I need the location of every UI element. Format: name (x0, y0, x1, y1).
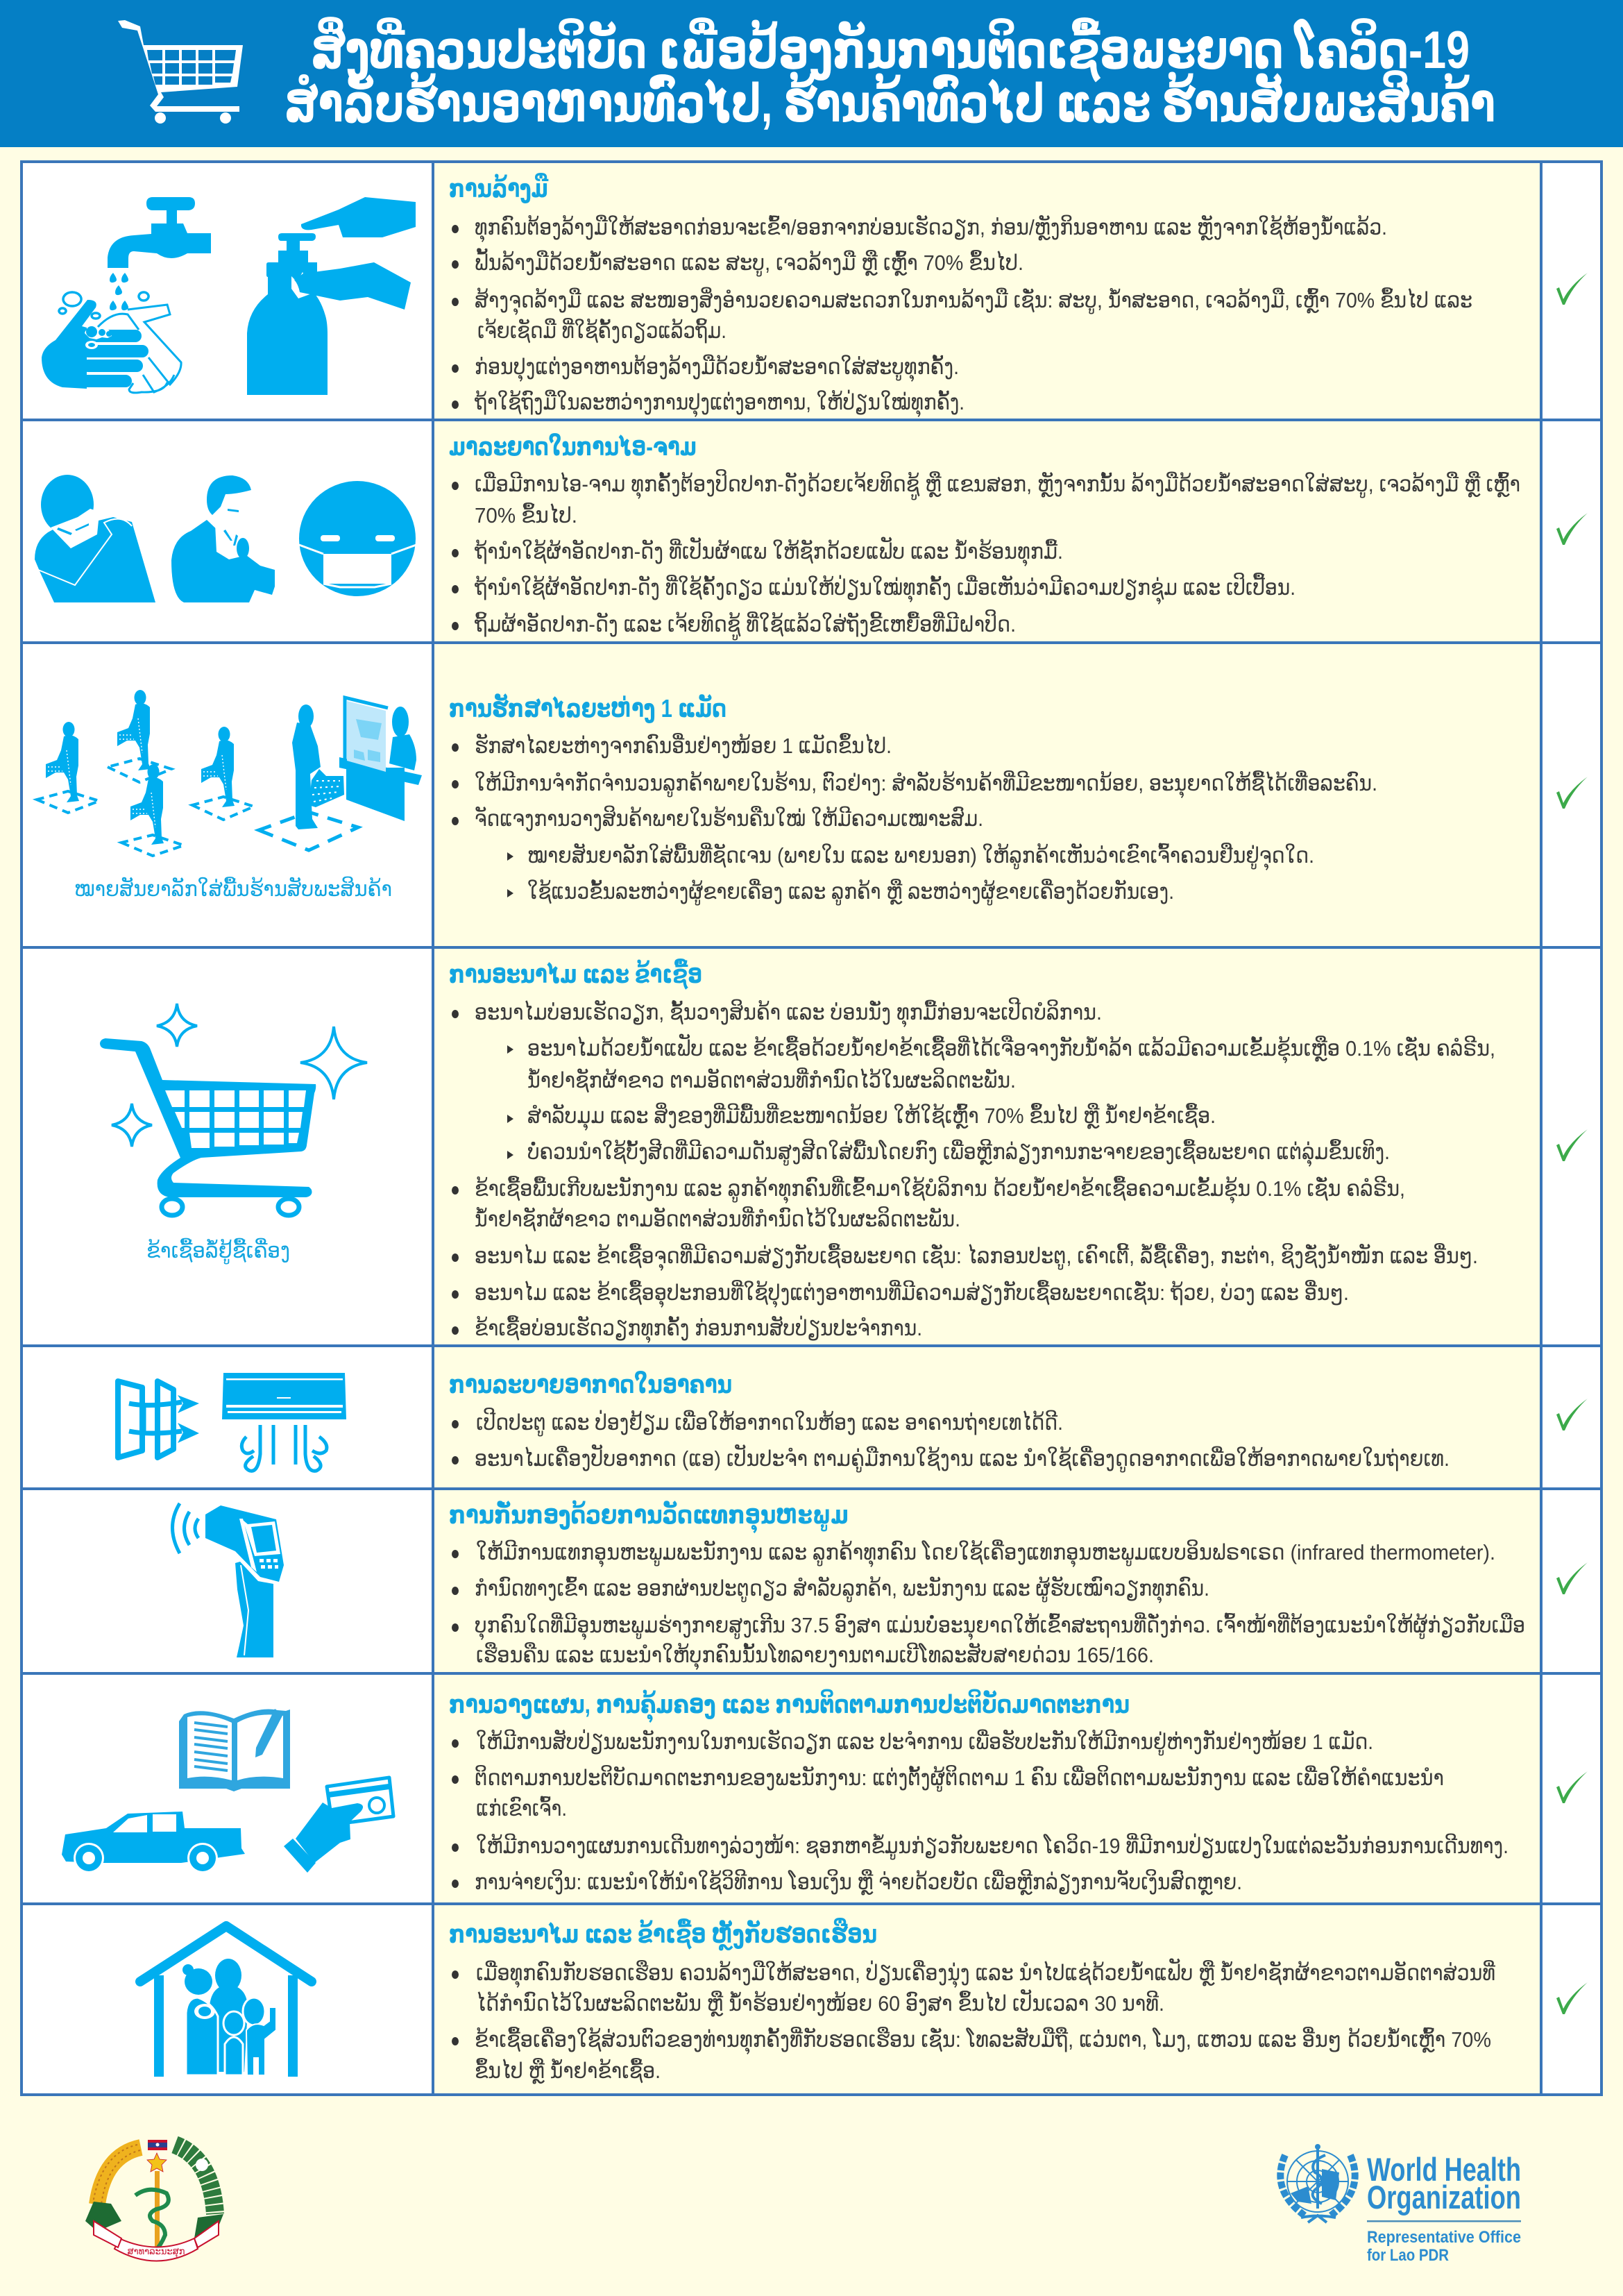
panel: temperature screening (172, 1501, 1588, 1670)
logo: Lao Ministry of Health emblem: ສາທາລະນະສຸກ (128, 2246, 185, 2258)
bullet list: ເຮືອນຄືນ ແລະ ແນະນຳໃຫ້ບຸກຄົນນັ້ນໂທລາຍງານຕາມເບີໂທລະສັບສາຍດ່ວນ 165/166. (476, 1641, 1154, 1670)
bullet list: ຈັດແຈງການວາງສິນຄ້າພາຍໃນຮ້ານຄືນໃໝ່ ໃຫ້ມີຄວາມເໝາະສົມ. (475, 805, 983, 831)
header banner (0, 0, 1623, 147)
bullet list (452, 214, 1472, 417)
icon: hand holding bank card (284, 1778, 393, 1873)
icon: check mark (1556, 1771, 1588, 1803)
WHO wordmark: for Lao PDR (1367, 2246, 1449, 2265)
logo: Lao Ministry of Health emblem (85, 2140, 223, 2261)
panel: ventilation (118, 1370, 1588, 1472)
WHO wordmark: Representative Office (1367, 2228, 1521, 2247)
bullet list: ທຸກຄົນຕ້ອງລ້າງມືໃຫ້ສະອາດກ່ອນຈະເຂົ້າ/ອອກຈາກບ່ອນເຮັດວຽກ, ກ່ອນ/ຫຼັງກິນອາຫານ ແລະ ຫຼັງຈາກໃຊ້ຫ້ອງນ້ຳແລ້ວ. (475, 214, 1387, 242)
bullet list: ໃຫ້ມີການວາງແຜນການເດີນທາງລ່ວງໜ້າ: ຊອກຫາຂໍ້ມູນກ່ຽວກັບພະຍາດ ໂຄວິດ-19 ທີ່ມີການປ່ຽນແປງໃນແຕ່ລະວັນກ່ອນການເດີນທາງ. (476, 1833, 1509, 1859)
WHO emblem (1280, 2144, 1355, 2222)
bullet list (452, 469, 1520, 640)
icon: family in a house (140, 1926, 312, 2077)
bullet list: ຂຶ້ນໄປ ຫຼື ນ້ຳຢາຂ້າເຊື້ອ. (475, 2057, 661, 2084)
icon: check mark (1556, 1129, 1588, 1161)
panel: cleaning and disinfection (100, 959, 1588, 1343)
panel: physical distancing (37, 690, 1588, 905)
icon: open book and pencil (179, 1709, 290, 1791)
icon: check mark (1556, 1982, 1588, 2014)
bullet list: ກຳນົດທາງເຂົ້າ ແລະ ອອກຜ່ານປະຕູດຽວ ສຳລັບລູກຄ້າ, ພະນັກງານ ແລະ ຜູ້ຮັບເໝົາວຽກທຸກຄົນ. (475, 1576, 1209, 1603)
bullet list: ໃຫ້ມີການສັບປ່ຽນພະນັກງານໃນການເຮັດວຽກ ແລະ ປະຈຳການ ເພື່ອຮັບປະກັນໃຫ້ມີການຢູ່ຫ່າງກັນຢ່າງໜ້ອຍ 1 ແມັດ. (476, 1729, 1373, 1755)
icon: check mark (1556, 513, 1588, 545)
icon: check mark (1556, 1399, 1588, 1430)
bullet list: ເມື່ອທຸກຄົນກັບຮອດເຮືອນ ຄວນລ້າງມືໃຫ້ສະອາດ, ປ່ຽນເຄື່ອງນຸ່ງ ແລະ ນຳໄປແຊ່ດ້ວຍນ້ຳແຟັບ ຫຼື ນ້ຳຢາຊັກຜ້າຂາວຕາມອັດຕາສ່ວນທີ່ (476, 1959, 1495, 1988)
heading: ການກັ່ນກອງດ້ວຍການວັດແທກອຸນຫະພູມ (449, 1501, 849, 1534)
icon: person coughing into elbow (35, 475, 155, 602)
bullet list: ອະນາໄມ ແລະ ຂ້າເຊື້ອຈຸດທີ່ມີຄວາມສ່ຽງກັບເຊື້ອພະຍາດ ເຊັ່ນ: ໄລກອນປະຕູ, ເຄົາເຕີ້, ລໍ້ຊື້ເຄື່ອງ, ກະຕ່າ, ຊິງຊັ່ງນ້ຳໜັກ ແລະ ອື່ນໆ. (475, 1243, 1478, 1271)
bullet list (452, 733, 1377, 905)
heading: ການລ້າງມື (449, 173, 549, 203)
bullet list: ຖ້າໃຊ້ຖົງມືໃນລະຫວ່າງການປຸງແຕ່ງອາຫານ, ໃຫ້ປ່ຽນໃໝ່ທຸກຄັ້ງ. (474, 389, 965, 417)
bullet list: ຟັ້ນລ້າງມືດ້ວຍນ້ຳສະອາດ ແລະ ສະບູ, ເຈວລ້າງມື ຫຼື ເຫຼົ້າ 70% ຂຶ້ນໄປ. (475, 248, 1023, 276)
bullet list: ຖ້ານຳໃຊ້ຜ້າອັດປາກ-ດັງ ທີ່ໃຊ້ຄັ້ງດຽວ ແມ່ນໃຫ້ປ່ຽນໃໝ່ທຸກຄັ້ງ ເມື່ອເຫັນວ່າມີຄວາມປຽກຊຸ່ມ ແລະ ເປິເປື້ອນ. (474, 572, 1295, 605)
panel: cough and sneeze etiquette (35, 432, 1588, 640)
bullet list: ບຸກຄົນໃດທີ່ມີອຸນຫະພູມຮ່າງກາຍສູງເກີນ 37.5 ອົງສາ ແມ່ນບໍ່ອະນຸຍາດໃຫ້ເຂົ້າສະຖານທີ່ດັ່ງກ່າວ. ເຈົ້າໜ້າທີ່ຕ້ອງແນະນຳໃຫ້ຜູ້ກ່ຽວກັບເມືອ (475, 1612, 1525, 1640)
icon: infrared thermometer (172, 1503, 284, 1657)
bullet list: ອະນາໄມເຄື່ອງປັບອາກາດ (ແອ) ເປັນປະຈຳ ຕາມຄູ່ມືການໃຊ້ງານ ແລະ ນຳໃຊ້ເຄື່ອງດູດອາກາດເພື່ອໃຫ້ອາກາດພາຍໃນຖ່າຍເທ. (475, 1445, 1450, 1472)
bullet list: ອະນາໄມ ແລະ ຂ້າເຊື້ອອຸປະກອນທີ່ໃຊ້ປຸງແຕ່ງອາຫານທີ່ມີຄວາມສ່ຽງກັບເຊື້ອພະຍາດເຊັ່ນ: ຖ້ວຍ, ບ່ວງ ແລະ ອື່ນໆ. (475, 1280, 1349, 1308)
bullet list: ສ້າງຈຸດລ້າງມື ແລະ ສະໜອງສິ່ງອຳນວຍຄວາມສະດວກໃນການລ້າງມື ເຊັ່ນ: ສະບູ, ນ້ຳສະອາດ, ເຈວລ້າງມື, ເຫຼົ້າ 70% ຂຶ້ນໄປ ແລະ (475, 287, 1472, 315)
bullet list (452, 1729, 1509, 1895)
icon: person sneezing into tissue (171, 475, 275, 602)
bullet list: ຂ້າເຊື້ອພື້ນເກີບພະນັກງານ ແລະ ລູກຄ້າທຸກຄົນທີ່ເຂົ້າມາໃຊ້ບໍລິການ ດ້ວຍນ້ຳຢາຂ້າເຊື້ອຄວາມເຂັ້ມຂຸ້ນ 0.1% ເຊັ່ນ ຄລໍຣີນ, (475, 1176, 1405, 1204)
bullet list: ສຳລັບມຸມ ແລະ ສິ່ງຂອງທີ່ມີພື້ນທີ່ຂະໜາດນ້ອຍ ໃຫ້ໃຊ້ເຫຼົ້າ 70% ຂຶ້ນໄປ ຫຼື ນ້ຳຢາຂ້າເຊື້ອ. (527, 1102, 1216, 1131)
bullet list (452, 1407, 1450, 1472)
bullet list: ແກ່ເຂົາເຈົ້າ. (476, 1796, 567, 1821)
bullet list: ເມື່ອມີການໄອ-ຈາມ ທຸກຄັ້ງຕ້ອງປິດປາກ-ດັງດ້ວຍເຈ້ຍທິດຊູ້ ຫຼື ແຂນສອກ, ຫຼັງຈາກນັ້ນ ລ້າງມືດ້ວຍນ້ຳສະອາດໃສ່ສະບູ, ເຈວລ້າງມື ຫຼື ເຫຼົ້າ (475, 469, 1520, 500)
bullet list: ການຈ່າຍເງິນ: ແນະນຳໃຫ້ນຳໃຊ້ວິທີການ ໂອນເງິນ ຫຼື ຈ່າຍດ້ວຍບັດ ເພື່ອຫຼີກລ່ຽງການຈັບເງິນສົດຫຼາຍ. (475, 1868, 1242, 1895)
bullet list: ບໍ່ຄວນນຳໃຊ້ບັ້ງສີດທີ່ມີຄວາມດັນສູງສີດໃສ່ພື້ນໂດຍກົງ ເພື່ອຫຼີກລ່ຽງການກະຈາຍຂອງເຊື້ອພະຍາດ ແຕ່ລຸ່ມຂຶ້ນເທິງ. (527, 1138, 1390, 1167)
bullet list: ຕິດຕາມການປະຕິບັດມາດຕະການຂອງພະນັກງານ: ແຕ່ງຕັ້ງຜູ້ຕິດຕາມ 1 ຄົນ ເພື່ອຕິດຕາມພະນັກງານ ແລະ ເພື່ອໃຫ້ຄຳແນະນຳ (475, 1765, 1444, 1791)
caption: ໝາຍສັນຍາລັກໃສ່ພື້ນຮ້ານສັບພະສິນຄ້າ (74, 876, 392, 901)
icon: clean shopping cart (100, 1004, 367, 1215)
icon: ventilation window with arrows (118, 1381, 199, 1458)
bullet list: ຖ້ານຳໃຊ້ຜ້າອັດປາກ-ດັງ ທີ່ເປັນຜ້າແພ ໃຫ້ຊັກດ້ວຍແຟັບ ແລະ ນ້ຳຮ້ອນທຸກມື້. (474, 537, 1063, 566)
bullet list (452, 1959, 1495, 2084)
heading: ການວາງແຜນ, ການຄຸ້ມຄອງ ແລະ ການຕິດຕາມການປະຕິບັດມາດຕະການ (449, 1689, 1130, 1723)
bullet list: ໄດ້ກຳນົດໄວ້ໃນຜະລິດຕະພັນ ຫຼື ນ້ຳຮ້ອນຢ່າງໜ້ອຍ 60 ອົງສາ ຂຶ້ນໄປ ເປັນເວລາ 30 ນາທີ. (476, 1990, 1164, 2016)
caption: ຂ້າເຊື້ອລໍ້ຢູ້ຊື້ເຄື່ອງ (146, 1238, 290, 1264)
heading: ການອະນາໄມ ແລະ ຂ້າເຊື້ອ (449, 959, 702, 990)
bullet list: ຮັກສາໄລຍະຫ່າງຈາກຄົນອື່ນຢ່າງໜ້ອຍ 1 ແມັດຂຶ້ນໄປ. (475, 733, 892, 758)
bullet list: ອະນາໄມດ້ວຍນ້ຳແຟັບ ແລະ ຂ້າເຊື້ອດ້ວຍນ້ຳຢາຂ້າເຊື້ອທີ່ໄດ້ເຈືອຈາງກັບນ້ຳລ້າ ແລ້ວມີຄວາມເຂັ້ມຂຸ້ນເຫຼືອ 0.1% ເຊັ່ນ ຄລໍຣີນ, (527, 1034, 1495, 1063)
bullet list: ໃຫ້ມີການແທກອຸນຫະພູມພະນັກງານ ແລະ ລູກຄ້າທຸກຄົນ ໂດຍໃຊ້ເຄື່ອງແທກອຸນຫະພູມແບບອິນຟຣາເຣດ (infrared thermometer). (476, 1539, 1495, 1567)
bullet list: ອະນາໄມບ່ອນເຮັດວຽກ, ຊັ້ນວາງສິນຄ້າ ແລະ ບ່ອນນັ່ງ ທຸກມື້ກ່ອນຈະເປີດບໍລິການ. (475, 997, 1102, 1027)
bullet list: ເປີດປະຕູ ແລະ ປ່ອງຢ້ຽມ ເພື່ອໃຫ້ອາກາດໃນຫ້ອງ ແລະ ອາຄານຖ່າຍເທໄດ້ດີ. (476, 1407, 1063, 1436)
WHO wordmark: Organization (1367, 2179, 1521, 2215)
bullet list: ເຈ້ຍເຊັດມື ທີ່ໃຊ້ຄັ້ງດຽວແລ້ວຖິ້ມ. (477, 318, 726, 343)
bullet list: ໝາຍສັນຍາລັກໃສ່ພື້ນທີ່ຊັດເຈນ (ພາຍໃນ ແລະ ພາຍນອກ) ໃຫ້ລູກຄ້າເຫັນວ່າເຂົາເຈົ້າຄວນຢືນຢູ່ຈຸດໃດ. (527, 843, 1314, 870)
bullet list: ກ່ອນປຸງແຕ່ງອາຫານຕ້ອງລ້າງມືດ້ວຍນ້ຳສະອາດໃສ່ສະບູທຸກຄັ້ງ. (475, 354, 959, 382)
bullet list: ໃຫ້ມີການຈຳກັດຈຳນວນລູກຄ້າພາຍໃນຮ້ານ, ຕົວຢ່າງ: ສຳລັບຮ້ານຄ້າທີ່ມີຂະໜາດນ້ອຍ, ອະນຸຍາດໃຫ້ຊື້ໄດ້ເທື່ອລະຄົນ. (475, 770, 1377, 798)
bullet list: ຂ້າເຊື້ອບ່ອນເຮັດວຽກທຸກຄັ້ງ ກ່ອນການສັບປ່ຽນປະຈຳການ. (475, 1315, 922, 1343)
bullet list (452, 997, 1495, 1343)
bullet list (452, 1539, 1525, 1670)
bullet list: ນ້ຳຢາຊັກຜ້າຂາວ ຕາມອັດຕາສ່ວນທີ່ກຳນົດໄວ້ໃນຜະລິດຕະພັນ. (475, 1206, 960, 1231)
bullet list: 70% ຂຶ້ນໄປ. (475, 503, 577, 527)
icon: shoppers on floor markers at a counter (37, 690, 422, 856)
icon: tap and washing hands (42, 197, 211, 393)
bullet list: ນ້ຳຢາຊັກຜ້າຂາວ ຕາມອັດຕາສ່ວນທີ່ກຳນົດໄວ້ໃນຜະລິດຕະພັນ. (527, 1067, 1016, 1092)
icon: soap bottle and hands (247, 197, 416, 395)
icon: check mark (1556, 777, 1588, 809)
bullet list: ໃຊ້ແນວຂັ້ນລະຫວ່າງຜູ້ຂາຍເຄື່ອງ ແລະ ລູກຄ້າ ຫຼື ລະຫວ່າງຜູ້ຂາຍເຄື່ອງດ້ວຍກັນເອງ. (527, 878, 1174, 905)
icon: air conditioner (222, 1373, 346, 1471)
panel: after returning home (140, 1918, 1588, 2084)
WHO wordmark: World Health (1367, 2151, 1521, 2188)
icon: pickup truck (62, 1812, 245, 1873)
panel: hand washing (42, 173, 1588, 417)
heading: ການອະນາໄມ ແລະ ຂ້າເຊື້ອ ຫຼັງກັບຮອດເຮືອນ (449, 1918, 877, 1950)
logo: World Health Organization (1280, 2144, 1521, 2265)
heading: ການຮັກສາໄລຍະຫ່າງ 1 ແມັດ (449, 693, 726, 723)
heading: ມາລະຍາດໃນການໄອ-ຈາມ (449, 432, 697, 461)
icon: check mark (1556, 1562, 1588, 1594)
bullet list: ຖິ້ມຜ້າອັດປາກ-ດັງ ແລະ ເຈ້ຍທິດຊູ້ ທີ່ໃຊ້ແລ້ວໃສ່ຖັງຂີ້ເຫຍື້ອທີ່ມີຝາປິດ. (474, 609, 1016, 640)
icon: header shopping cart (118, 20, 243, 124)
heading: ການລະບາຍອາກາດໃນອາຄານ (449, 1370, 732, 1399)
icon: face with mask (299, 481, 416, 596)
bullet list: ຂ້າເຊື້ອເຄື່ອງໃຊ້ສ່ວນຕົວຂອງທ່ານທຸກຄັ້ງທີ່ກັບຮອດເຮືອນ ເຊັ່ນ: ໂທລະສັບມືຖື, ແວ່ນຕາ, ໂມງ, ແຫວນ ແລະ ອື່ນໆ ດ້ວຍນ້ຳເຫຼົ້າ 70% (475, 2026, 1491, 2054)
WHO wordmark (1367, 2151, 1521, 2265)
icon: check mark (1556, 273, 1588, 305)
title (284, 16, 1495, 133)
panel: planning and monitoring (62, 1689, 1588, 1895)
